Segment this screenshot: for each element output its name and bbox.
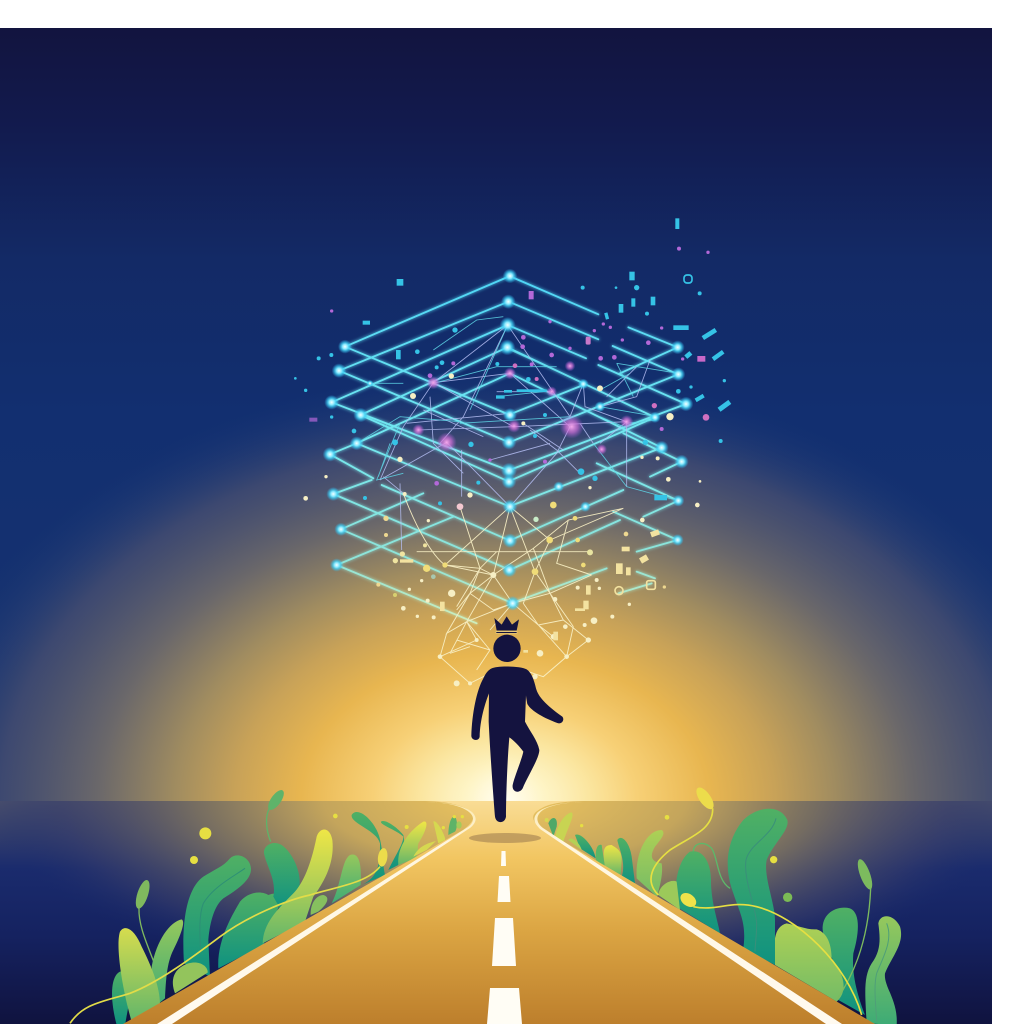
violet data particles bbox=[309, 247, 710, 486]
cream web lines around the crown bbox=[403, 493, 623, 683]
glowing network nodes bbox=[323, 269, 693, 611]
cyan ring particle bbox=[684, 275, 692, 283]
figure ground shadow bbox=[469, 833, 541, 843]
cream block particles bbox=[400, 529, 660, 653]
cream and gold data particles bbox=[303, 373, 701, 686]
road centre dashes bbox=[487, 851, 522, 1024]
cyan data particles bbox=[294, 218, 731, 505]
data network cube bbox=[294, 218, 731, 686]
night sky background bbox=[0, 28, 992, 803]
crowned walking figure bbox=[471, 616, 563, 822]
cream ring particles bbox=[615, 581, 655, 595]
layered diamond grid bbox=[330, 276, 686, 623]
head bbox=[493, 635, 521, 662]
right road edge line bbox=[534, 802, 842, 1024]
ground base bbox=[0, 801, 992, 1024]
horizon light bloom bbox=[450, 750, 560, 802]
left road edge line bbox=[157, 802, 476, 1024]
plants right of the road bbox=[545, 785, 901, 1024]
ground glow bbox=[0, 801, 992, 1024]
plants left of the road bbox=[70, 788, 464, 1024]
thin web lines, violet and cyan bbox=[380, 325, 650, 550]
sunrise glow bbox=[0, 28, 992, 803]
crown bbox=[494, 616, 519, 631]
road bbox=[123, 801, 875, 1024]
pink glow clusters bbox=[412, 361, 633, 455]
body silhouette bbox=[471, 666, 563, 822]
crown gold band bbox=[496, 631, 517, 634]
